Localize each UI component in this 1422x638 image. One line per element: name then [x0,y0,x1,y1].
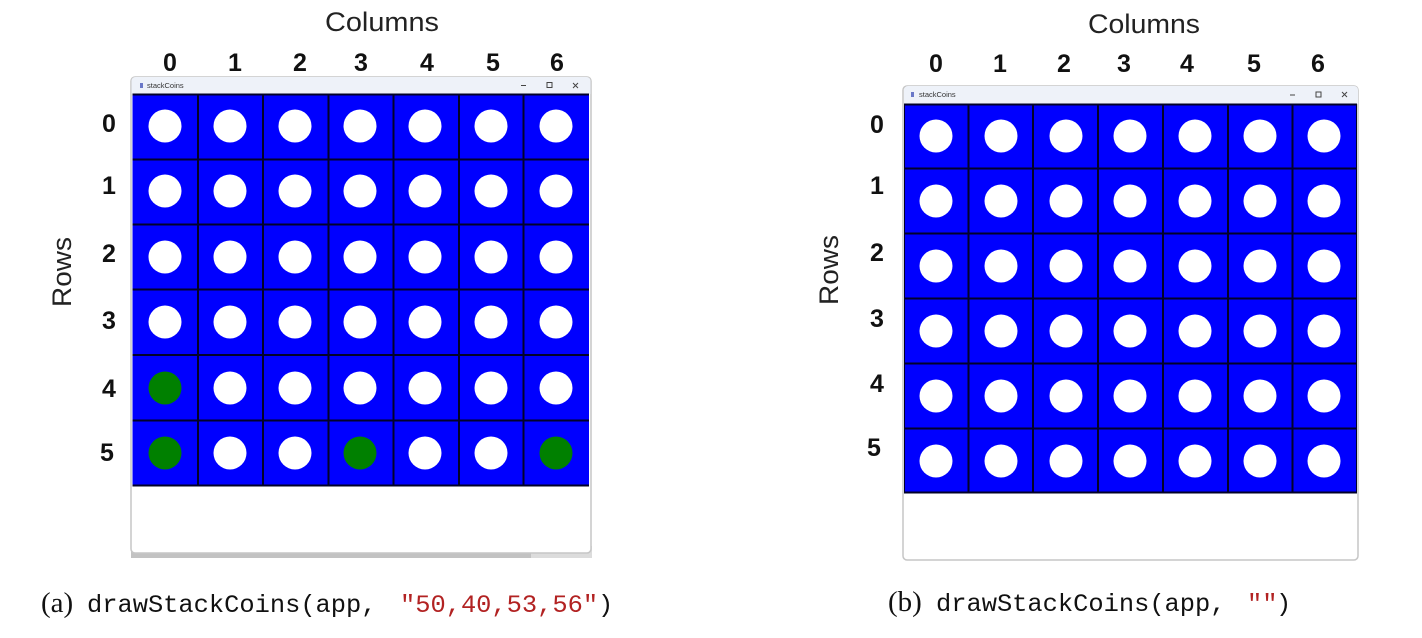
row numbers: 4 [102,375,116,403]
row numbers: 5 [100,439,114,467]
row numbers: 1 [870,172,884,200]
column numbers: 6 [1311,50,1325,78]
column numbers [929,50,1325,78]
caption a: (a) [41,587,73,619]
row numbers: 4 [870,370,884,398]
row numbers: 3 [870,305,884,333]
column numbers: 3 [354,49,368,77]
panel b: empty board [814,9,1358,560]
column numbers: 1 [993,50,1007,78]
heading: columns: Columns [1088,9,1200,39]
caption b: "" [1247,590,1277,619]
row numbers: 1 [102,172,116,200]
heading: columns: Columns [325,7,439,37]
column numbers: 0 [929,50,943,78]
column numbers: 2 [1057,50,1071,78]
window frame [131,77,592,558]
column numbers: 4 [420,49,434,77]
caption a: drawStackCoins(app, [87,591,377,620]
heading: rows: Rows [814,235,844,305]
row numbers: 2 [102,240,116,268]
caption b: (b) [888,586,922,618]
row numbers: 3 [102,307,116,335]
coin grid [132,94,589,486]
window frame: stackCoins [147,81,184,90]
row numbers [867,111,884,462]
row numbers: 0 [102,110,116,138]
caption b: drawStackCoins(app, [936,590,1226,619]
window frame [903,86,1358,560]
column numbers: 5 [1247,50,1261,78]
column numbers: 5 [486,49,500,77]
caption b: ) [1276,590,1291,619]
column numbers: 0 [163,49,177,77]
caption a: "50,40,53,56" [400,591,598,620]
column numbers: 3 [1117,50,1131,78]
panel a: stacked coins board [47,7,592,558]
row numbers: 5 [867,434,881,462]
column numbers: 2 [293,49,307,77]
white empty slots [148,110,572,470]
row numbers: 2 [870,239,884,267]
window frame: stackCoins [919,90,956,99]
row numbers [100,110,116,467]
column numbers [163,49,564,77]
row numbers: 0 [870,111,884,139]
caption a: ) [598,591,613,620]
column numbers: 4 [1180,50,1194,78]
coin grid [904,104,1357,493]
green coins [148,372,572,470]
white empty slots [920,120,1340,478]
column numbers: 1 [228,49,242,77]
heading: rows: Rows [47,237,77,307]
column numbers: 6 [550,49,564,77]
